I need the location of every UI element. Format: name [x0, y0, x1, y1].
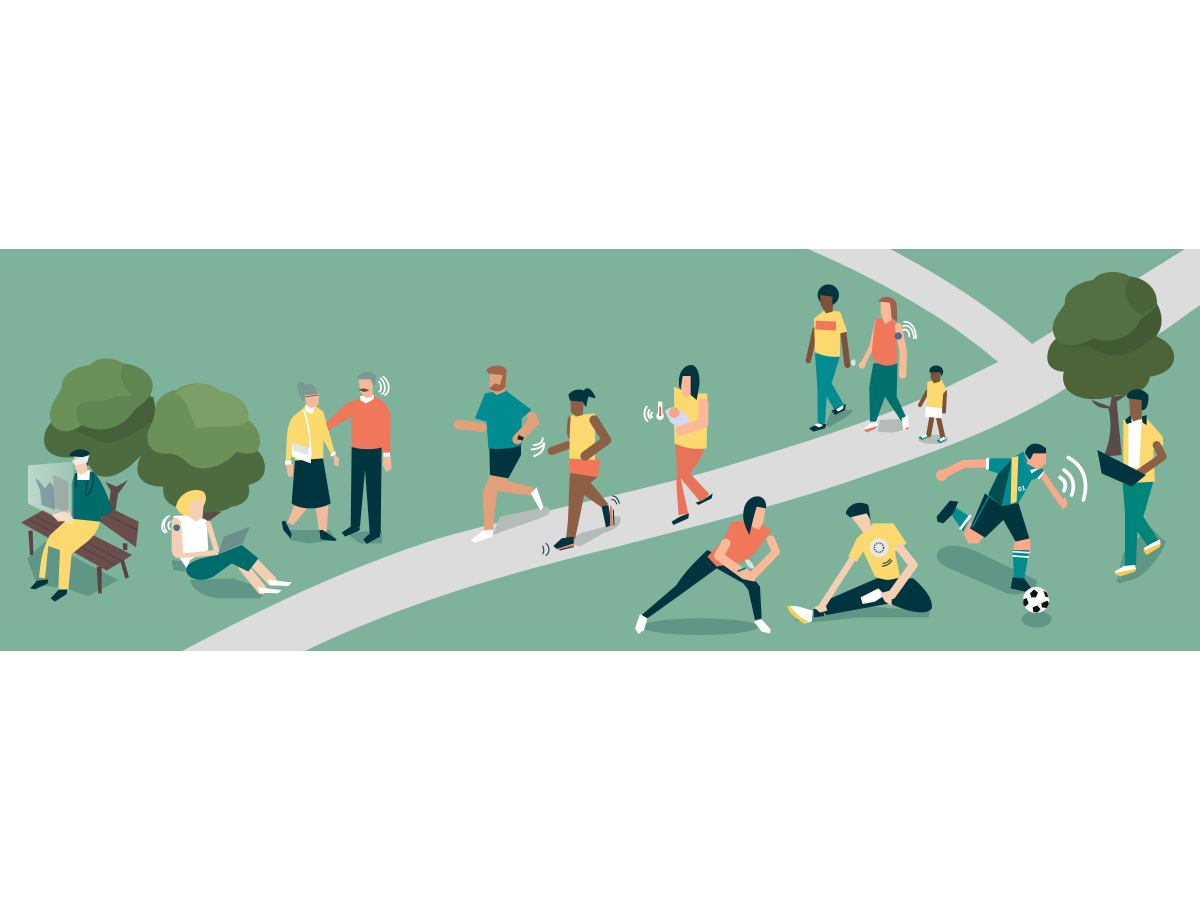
forking footpath: [182, 249, 1200, 651]
bench: [21, 506, 139, 593]
person: elderly woman: [282, 382, 339, 543]
person: elderly man with hearing sensor: [326, 372, 392, 544]
shadow under bench: [27, 542, 118, 596]
group: runners and mother: [458, 365, 713, 555]
shadows on path: [493, 507, 621, 547]
icon: football: [1023, 587, 1049, 613]
group: stretching people: [635, 496, 932, 635]
shadow: man stretching: [793, 607, 930, 623]
person: child walking: [918, 366, 948, 444]
person: woman sitting with laptop: [162, 490, 292, 598]
person: footballer: [936, 444, 1067, 592]
tree: front left: [137, 383, 265, 522]
person: male runner: [458, 366, 543, 543]
person: man with laptop: [1097, 389, 1163, 577]
shadow: man with laptop: [1117, 527, 1166, 583]
icon: wireless signal: [1060, 458, 1085, 500]
tree: back left: [44, 359, 157, 514]
person: doctor with visor and hologram: [28, 449, 113, 602]
shadow: woman stretching: [642, 618, 758, 635]
person: footballer: 01: [1017, 485, 1027, 494]
person: pregnant woman with arm sensor: [851, 297, 916, 433]
person: man stretching with chest sensor: [787, 503, 932, 624]
group: left scene: [21, 359, 392, 602]
shadow: footballer: [937, 546, 1037, 594]
group: right scene: [936, 272, 1174, 628]
person: man walking: [808, 284, 853, 432]
person: woman stretching: [635, 496, 776, 634]
group: walking family: [808, 284, 948, 444]
panel: green park ground: [0, 249, 1200, 651]
shadow: ball: [1022, 611, 1052, 628]
person: female runner with foot sensors: [532, 388, 619, 555]
person: mother holding baby: [644, 365, 713, 525]
tree: right: [1047, 272, 1174, 457]
